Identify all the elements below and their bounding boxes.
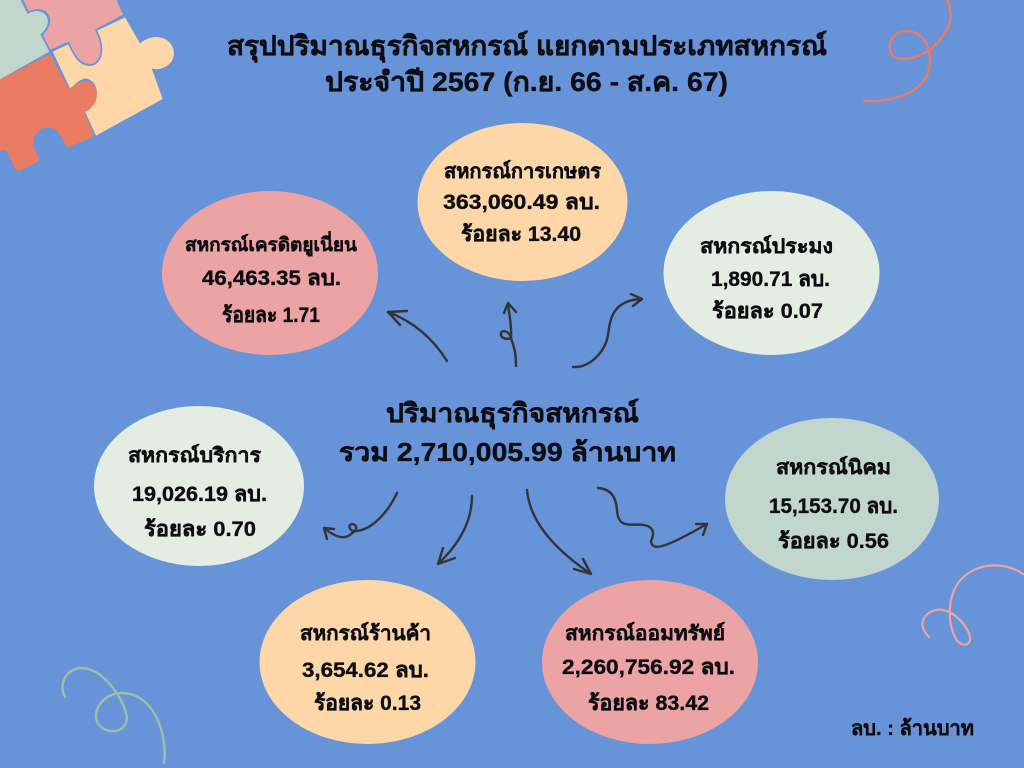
panel: settlement cooperative	[725, 418, 939, 580]
panel: savings cooperative: 2,260,756.92 ลบ.	[562, 656, 735, 679]
decoration: green swirl	[63, 668, 165, 763]
panel: agriculture cooperative: สหกรณ์การเกษตร	[444, 160, 601, 183]
panel: credit union cooperative	[162, 191, 378, 355]
panel: savings cooperative	[542, 580, 758, 744]
arrow: to agriculture	[501, 303, 516, 366]
panel: store cooperative	[260, 580, 476, 744]
panel: credit union cooperative: ร้อยละ 1.71	[222, 303, 320, 327]
decoration: pink swirl	[922, 565, 1023, 645]
title	[227, 30, 827, 97]
panel: service cooperative: ร้อยละ 0.70	[144, 517, 256, 541]
panel: fishery cooperative: ร้อยละ 0.07	[712, 299, 823, 323]
panel: settlement cooperative: 15,153.70 ลบ.	[769, 495, 898, 518]
decoration: coral swirl	[864, 0, 951, 101]
panel: credit union cooperative: 46,463.35 ลบ.	[202, 267, 341, 290]
arrow: to credit union	[388, 311, 447, 361]
panel: fishery cooperative	[664, 191, 880, 355]
arrow: to savings	[527, 490, 591, 574]
panel: savings cooperative: สหกรณ์ออมทรัพย์	[565, 622, 725, 645]
arrow: to store	[438, 496, 472, 564]
panel: credit union cooperative: สหกรณ์เครดิตยูเนี่ยน	[185, 231, 357, 257]
panel: savings cooperative: ร้อยละ 83.42	[588, 691, 709, 715]
arrow: to service	[324, 493, 397, 539]
panel: fishery cooperative: สหกรณ์ประมง	[700, 235, 833, 258]
panel: agriculture cooperative	[418, 123, 628, 281]
panel: settlement cooperative: สหกรณ์นิคม	[776, 456, 891, 479]
panel: store cooperative: ร้อยละ 0.13	[314, 691, 421, 715]
panel: agriculture cooperative: 363,060.49 ลบ.	[443, 191, 600, 214]
center total: ปริมาณธุรกิจสหกรณ์	[386, 398, 639, 430]
arrow: to settlement	[598, 488, 707, 547]
center total: รวม 2,710,005.99 ล้านบาท	[339, 437, 676, 467]
panel: fishery cooperative: 1,890.71 ลบ.	[711, 268, 830, 291]
panel: settlement cooperative: ร้อยละ 0.56	[778, 529, 889, 553]
panel: service cooperative: 19,026.19 ลบ.	[132, 483, 267, 506]
panel: service cooperative	[94, 406, 304, 566]
center total	[339, 398, 676, 467]
arrow: to fishery	[573, 294, 642, 367]
note: unit abbreviation: ลบ. : ล้านบาท	[851, 717, 974, 740]
panel: store cooperative: 3,654.62 ลบ.	[302, 659, 429, 682]
title: สรุปปริมาณธุรกิจสหกรณ์ แยกตามประเภทสหกรณ์	[227, 30, 827, 63]
panel: store cooperative: สหกรณ์ร้านค้า	[300, 622, 431, 645]
panel: agriculture cooperative: ร้อยละ 13.40	[461, 222, 581, 246]
icon: puzzle pieces	[0, 0, 174, 171]
title: ประจำปี 2567 (ก.ย. 66 - ส.ค. 67)	[325, 67, 728, 97]
panel: service cooperative: สหกรณ์บริการ	[128, 444, 261, 467]
